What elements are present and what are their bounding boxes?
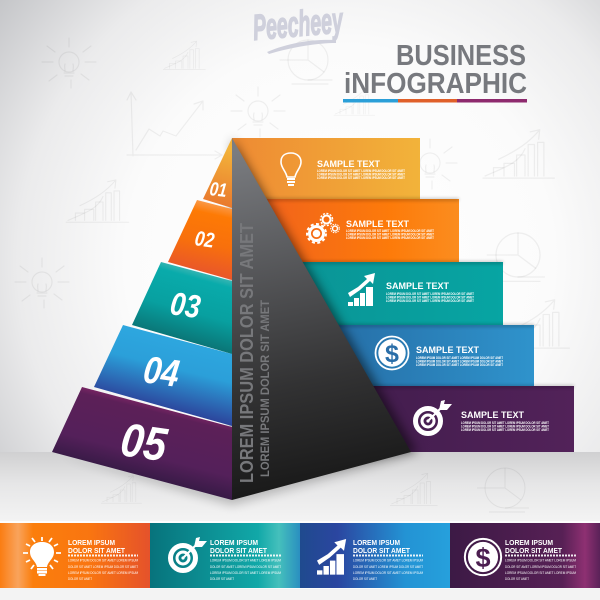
floor (0, 452, 600, 523)
bar 2 content (307, 214, 434, 243)
body text: LOREM IPSUM DOLOR SIT AMET LOREM IPSUM DOLOR SIT AMET (461, 424, 549, 428)
panel: blue ribbon (300, 523, 450, 588)
body text (416, 356, 503, 367)
heading: DOLOR SIT AMET (210, 546, 267, 555)
heading: DOLOR SIT AMET (353, 546, 410, 555)
body text: LOREM IPSUM DOLOR SIT AMET LOREM IPSUM (68, 558, 138, 562)
body text: LOREM IPSUM DOLOR SIT AMET LOREM IPSUM DOLOR SIT AMET (416, 356, 503, 360)
heading (353, 538, 410, 555)
icon: growth chart (348, 273, 375, 306)
bar 3 content (348, 273, 474, 306)
left face 5 (52, 387, 232, 500)
label: SAMPLE TEXT (416, 345, 479, 356)
body text: LOREM IPSUM DOLOR SIT AMET LOREM IPSUM DOLOR SIT AMET (346, 229, 434, 233)
bar 4: blue (232, 325, 534, 386)
label: SAMPLE TEXT (461, 410, 524, 421)
body text: DOLOR SIT AMET (505, 577, 530, 581)
heading: LOREM IPSUM (210, 538, 258, 547)
left face 3 (132, 262, 232, 354)
bar 5: purple (232, 386, 574, 452)
body text: LOREM IPSUM DOLOR SIT AMET LOREM IPSUM DOLOR SIT AMET (386, 296, 474, 300)
icon: dollar coin: $ (385, 340, 399, 368)
icon: dollar coin: $ (475, 543, 491, 573)
title underline (343, 99, 527, 102)
left face 4 (94, 325, 232, 426)
dotted rule (210, 554, 281, 556)
number 03: 03 (168, 286, 203, 326)
heading: DOLOR SIT AMET (505, 546, 562, 555)
bar 3: teal (232, 262, 503, 325)
body text: LOREM IPSUM DOLOR SIT AMET LOREM IPSUM DOLOR SIT AMET (317, 172, 405, 176)
floor doodles (101, 468, 529, 512)
icon: dollar coin (465, 539, 501, 575)
icon: light bulb (281, 153, 301, 185)
body text (505, 558, 577, 581)
dotted rule (68, 554, 138, 556)
body text: LOREM IPSUM DOLOR SIT AMET LOREM IPSUM DOLOR SIT AMET (317, 176, 405, 180)
heading: DOLOR SIT AMET (68, 546, 125, 555)
triangle shadow on bars (232, 138, 417, 490)
bar 1: orange-yellow (232, 138, 420, 199)
body text: LOREM IPSUM DOLOR SIT AMET LOREM IPSUM DOLOR SIT AMET (386, 299, 474, 303)
bar 4 content (376, 336, 503, 370)
bar 1 content (281, 153, 405, 185)
icon: shining bulb (23, 537, 61, 576)
body text: DOLOR SIT AMET (353, 577, 378, 581)
body text (353, 558, 424, 581)
body text: LOREM IPSUM DOLOR SIT AMET LOREM IPSUM (353, 571, 423, 575)
heading (210, 538, 267, 555)
body text: LOREM IPSUM DOLOR SIT AMET LOREM IPSUM DOLOR SIT AMET (416, 360, 503, 364)
body text: DOLOR SIT AMET LOREM IPSUM DOLOR SIT AMET (68, 565, 139, 569)
body text (210, 558, 282, 581)
dark triangle panel (232, 138, 411, 500)
body text: DOLOR SIT AMET (210, 577, 235, 581)
icon: gears (307, 214, 339, 243)
label: SAMPLE TEXT (346, 219, 409, 230)
pyramid shadow on floor (60, 455, 415, 505)
body text: LOREM IPSUM DOLOR SIT AMET LOREM IPSUM DOLOR SIT AMET (317, 169, 405, 173)
left face 2 (168, 200, 232, 280)
icon: target (416, 400, 452, 434)
body text (461, 421, 549, 432)
body text: LOREM IPSUM DOLOR SIT AMET LOREM IPSUM DOLOR SIT AMET (346, 232, 434, 236)
bar 5 content (416, 400, 549, 434)
heading (68, 538, 125, 555)
bottom strip highlight (0, 521, 600, 591)
number 01: 01 (208, 177, 228, 201)
body text: LOREM IPSUM DOLOR SIT AMET LOREM IPSUM (505, 558, 576, 562)
left face 1 (203, 138, 232, 208)
body text: LOREM IPSUM DOLOR SIT AMET LOREM IPSUM DOLOR SIT AMET (461, 421, 549, 425)
body text: LOREM IPSUM DOLOR SIT AMET LOREM IPSUM DOLOR SIT AMET (416, 363, 503, 367)
body text (386, 292, 474, 303)
panel: teal ribbon (150, 523, 300, 588)
number 05: 05 (118, 414, 171, 472)
panel: orange ribbon (0, 523, 150, 588)
title: iNFOGRAPHIC (344, 68, 527, 100)
body text: LOREM IPSUM DOLOR SIT AMET LOREM IPSUM (68, 571, 138, 575)
step bars (232, 138, 574, 452)
bar shadows (260, 198, 574, 388)
icon: growth chart (317, 539, 346, 575)
icon: target (170, 537, 207, 570)
label: SAMPLE TEXT (386, 281, 449, 292)
panel: purple ribbon (450, 523, 600, 588)
bar 2: orange (232, 199, 459, 262)
body text (68, 558, 139, 581)
dotted rule (353, 554, 423, 556)
body text: LOREM IPSUM DOLOR SIT AMET LOREM IPSUM DOLOR SIT AMET (461, 428, 549, 432)
heading (505, 538, 562, 555)
heading: LOREM IPSUM (68, 538, 115, 547)
body text: LOREM IPSUM DOLOR SIT AMET LOREM IPSUM DOLOR SIT AMET (386, 292, 474, 296)
background doodles (15, 38, 569, 512)
body text: DOLOR SIT AMET LOREM IPSUM DOLOR SIT AMET (353, 565, 424, 569)
logo: Peecheey (251, 0, 345, 54)
heading: LOREM IPSUM (353, 538, 400, 547)
bottom band below strip (0, 589, 600, 600)
vertical subtitle: LOREM IPSUM DOLOR SIT AMET (260, 300, 272, 477)
heading: LOREM IPSUM (505, 538, 553, 547)
body text: LOREM IPSUM DOLOR SIT AMET LOREM IPSUM (353, 558, 423, 562)
body text: LOREM IPSUM DOLOR SIT AMET LOREM IPSUM (210, 571, 281, 575)
body text: LOREM IPSUM DOLOR SIT AMET LOREM IPSUM DOLOR SIT AMET (346, 236, 434, 240)
title (344, 40, 527, 100)
number 04: 04 (141, 349, 182, 396)
number 02: 02 (193, 228, 216, 253)
vertical title: LOREM IPSUM DOLOR SIT AMET (237, 223, 257, 483)
label: SAMPLE TEXT (317, 159, 380, 170)
title: BUSINESS (396, 40, 526, 72)
dotted rule (505, 554, 576, 556)
body text: LOREM IPSUM DOLOR SIT AMET LOREM IPSUM (210, 558, 281, 562)
body text (317, 169, 405, 180)
body text: DOLOR SIT AMET (68, 577, 93, 581)
body text: DOLOR SIT AMET LOREM IPSUM DOLOR SIT AMET (210, 565, 282, 569)
body text: DOLOR SIT AMET LOREM IPSUM DOLOR SIT AMET (505, 565, 577, 569)
body text (346, 229, 434, 240)
body text: LOREM IPSUM DOLOR SIT AMET LOREM IPSUM (505, 571, 576, 575)
